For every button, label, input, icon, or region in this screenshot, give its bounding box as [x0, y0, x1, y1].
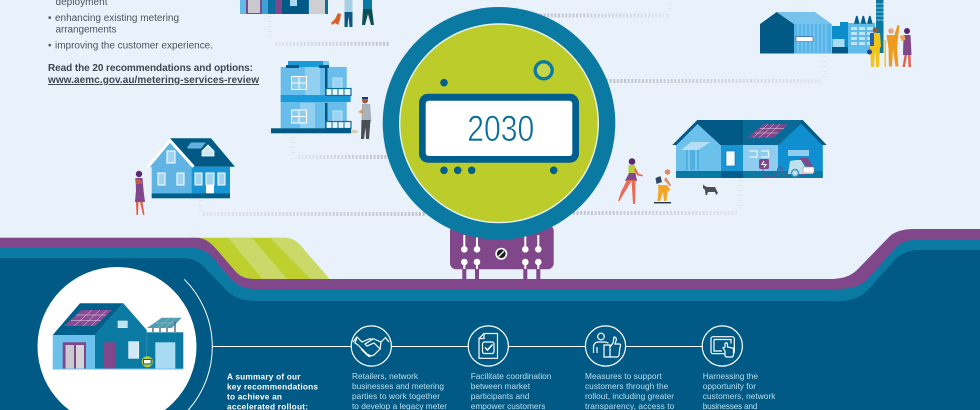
text block: intro bullets and link: enhancing existing metering: [55, 13, 179, 24]
dotted connector lines: [201, 3, 825, 214]
text block: intro bullets and link: arrangements: [56, 24, 116, 36]
solar panel: [747, 124, 788, 138]
panel: white circle with house: [38, 267, 196, 410]
text: recommendation 3: customers through the: [585, 381, 669, 391]
heading: summary: key recommendations: [227, 382, 318, 392]
meter display: [419, 94, 579, 163]
text: recommendation 4: [703, 371, 776, 410]
smart meter dial: [383, 7, 615, 240]
text: recommendation 2: [471, 371, 552, 410]
text: recommendation 3: [585, 371, 675, 410]
illustration: boy on skateboard: [654, 169, 671, 203]
icon: person and thumbs up: [585, 326, 626, 366]
wave: purple band: [0, 229, 980, 410]
wave: teal band: [0, 240, 980, 410]
heading: summary: to achieve an: [227, 392, 282, 402]
meter base: [450, 225, 554, 280]
text block: intro bullets and link: www.aemc.gov.au/metering-services-review: [47, 75, 259, 86]
text: recommendation 1: parties to work together: [352, 391, 440, 401]
text block: intro bullets and link: improving the customer experience.: [55, 40, 213, 52]
icon: document with tick: [468, 326, 508, 366]
illustration: cat: [703, 184, 718, 195]
text: recommendation 1: Retailers, network: [352, 371, 419, 381]
illustration: dog and two people top: [331, 0, 374, 27]
text: recommendation 1: [352, 371, 447, 410]
illustration: house with solar panels and EV: [672, 120, 827, 178]
text block: intro bullets and link: [47, 0, 259, 86]
text: recommendation 4: Harnessing the: [703, 371, 758, 381]
electric car: [788, 150, 814, 176]
text: recommendation 2: between market: [471, 381, 531, 391]
illustration: woman left: [135, 171, 145, 215]
illustration: woman walking: [618, 158, 643, 204]
illustration: three workers: [867, 25, 912, 67]
arc around circle: [184, 279, 212, 410]
small smart meter: [142, 356, 153, 367]
timeline line: [212, 346, 702, 348]
illustration: man beside apartment: [358, 97, 372, 139]
rooftop solar panel on frame: [147, 318, 182, 332]
text block: intro bullets and link: •: [48, 40, 52, 52]
icon: handshake: [351, 326, 391, 366]
illustration: two-storey house left: [148, 138, 235, 198]
meter indicator ring: [535, 62, 552, 79]
illustration: apartment building: [271, 61, 358, 133]
icon: tablet with pointing hand: [702, 326, 742, 366]
text: recommendation 2: participants and: [471, 391, 530, 401]
heading: summary: [227, 372, 318, 410]
text: recommendation 4: customers, network: [703, 391, 776, 401]
illustration: factory: [760, 0, 884, 54]
solar panel on roof: [64, 310, 112, 326]
meter indicator dots: [440, 79, 558, 174]
text: recommendation 2: Facilitate coordination: [471, 371, 552, 381]
text block: intro bullets and link: •: [48, 13, 52, 24]
lime wedge with stripes: [190, 238, 330, 280]
text: recommendation 1: businesses and metering: [352, 381, 444, 391]
text: recommendation 4: opportunity for: [703, 381, 756, 391]
wave: dark blue panel: [0, 250, 980, 410]
heading: summary: A summary of our: [227, 372, 301, 382]
text: recommendation 3: rollout, including greater: [585, 391, 674, 401]
text: recommendation 3: Measures to support: [585, 371, 662, 381]
EV charger: [759, 159, 806, 177]
text block: intro bullets and link: Read the 20 recommendations and options:: [48, 63, 253, 74]
illustration: cropped building top left: [240, 0, 328, 14]
meter display: 2030: [467, 108, 534, 149]
